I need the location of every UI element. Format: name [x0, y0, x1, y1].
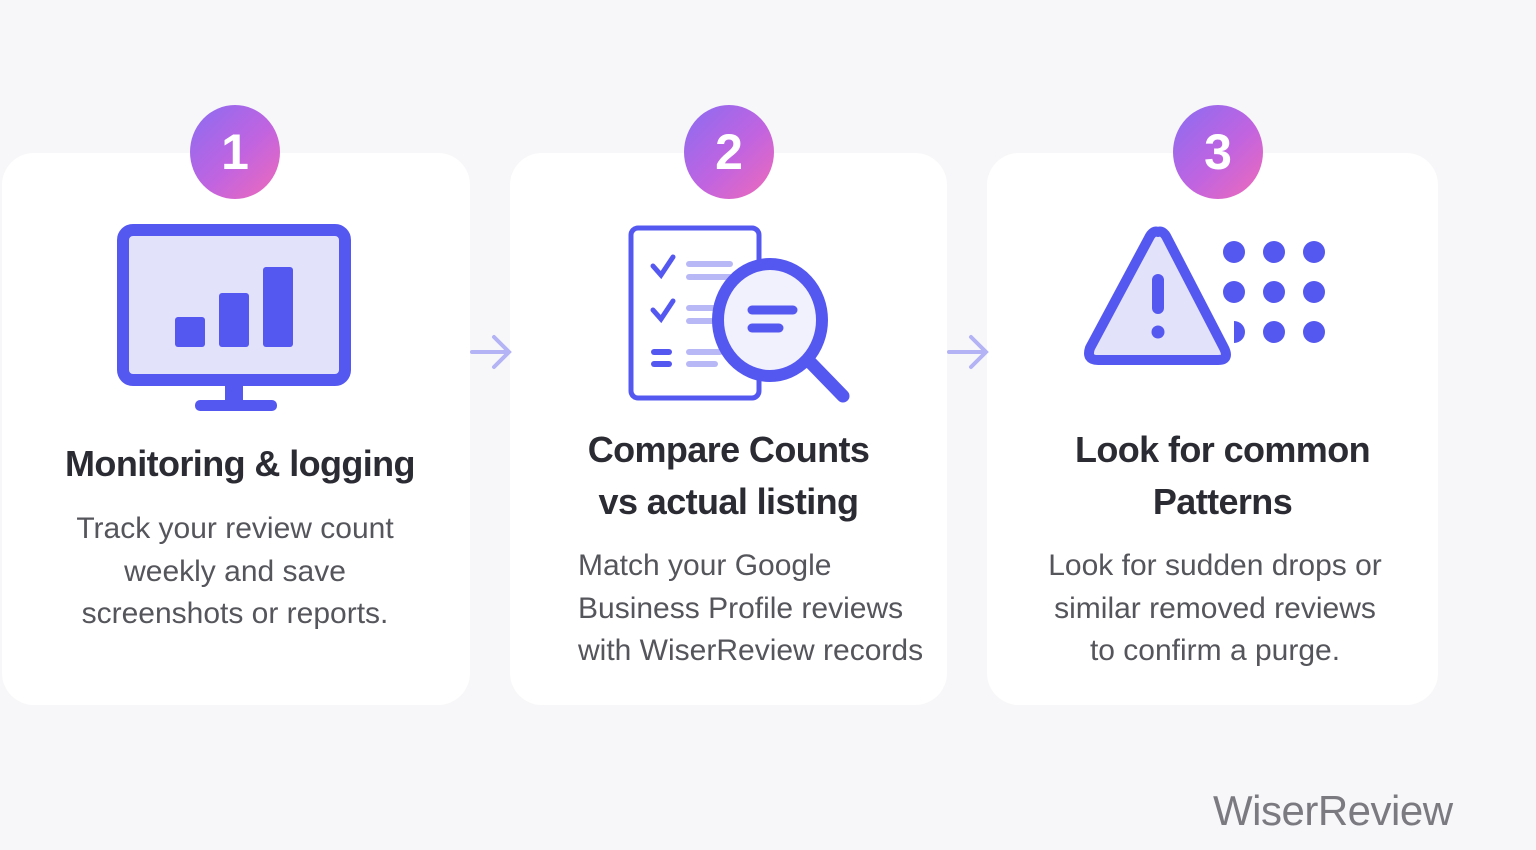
text 3: Look for sudden drops or [1048, 549, 1382, 582]
heading 2: Compare Counts [588, 429, 869, 470]
text 3: similar removed reviews [1054, 592, 1376, 624]
text 1: weekly and save [124, 554, 346, 588]
heading 1: Monitoring & logging [65, 443, 415, 484]
text 2: with WiserReview records [578, 634, 923, 667]
badge 2 [684, 105, 774, 199]
heading 2 [588, 429, 869, 522]
badge 1: 1 [221, 124, 249, 180]
panel: step 3 card [987, 153, 1438, 705]
icon: checklist with magnifier [628, 226, 850, 402]
badge 3 [1173, 105, 1263, 199]
badge 2: 2 [715, 124, 743, 180]
text 1 [76, 512, 394, 630]
badge 3: 3 [1204, 124, 1232, 180]
icon: warning triangle with dots [1084, 226, 1325, 365]
badge 1 [190, 105, 280, 199]
heading 3: Look for common [1075, 429, 1370, 470]
heading 2: vs actual listing [599, 481, 858, 522]
arrow 1 [470, 334, 512, 369]
panel: step 2 card [510, 153, 947, 705]
text 2 [578, 549, 923, 667]
text 3: to confirm a purge. [1090, 634, 1340, 667]
text 1: Track your review count [76, 512, 394, 545]
brand logo: WiserReview [1213, 787, 1453, 834]
icon: monitor with bar chart [117, 224, 351, 411]
arrow 2 [947, 334, 989, 369]
heading 3 [1075, 429, 1370, 522]
panel: step 1 card [2, 153, 470, 705]
heading 3: Patterns [1153, 481, 1292, 522]
text 3 [1048, 549, 1382, 667]
text 2: Business Profile reviews [578, 592, 903, 624]
text 2: Match your Google [578, 549, 831, 582]
text 1: screenshots or reports. [82, 597, 388, 630]
